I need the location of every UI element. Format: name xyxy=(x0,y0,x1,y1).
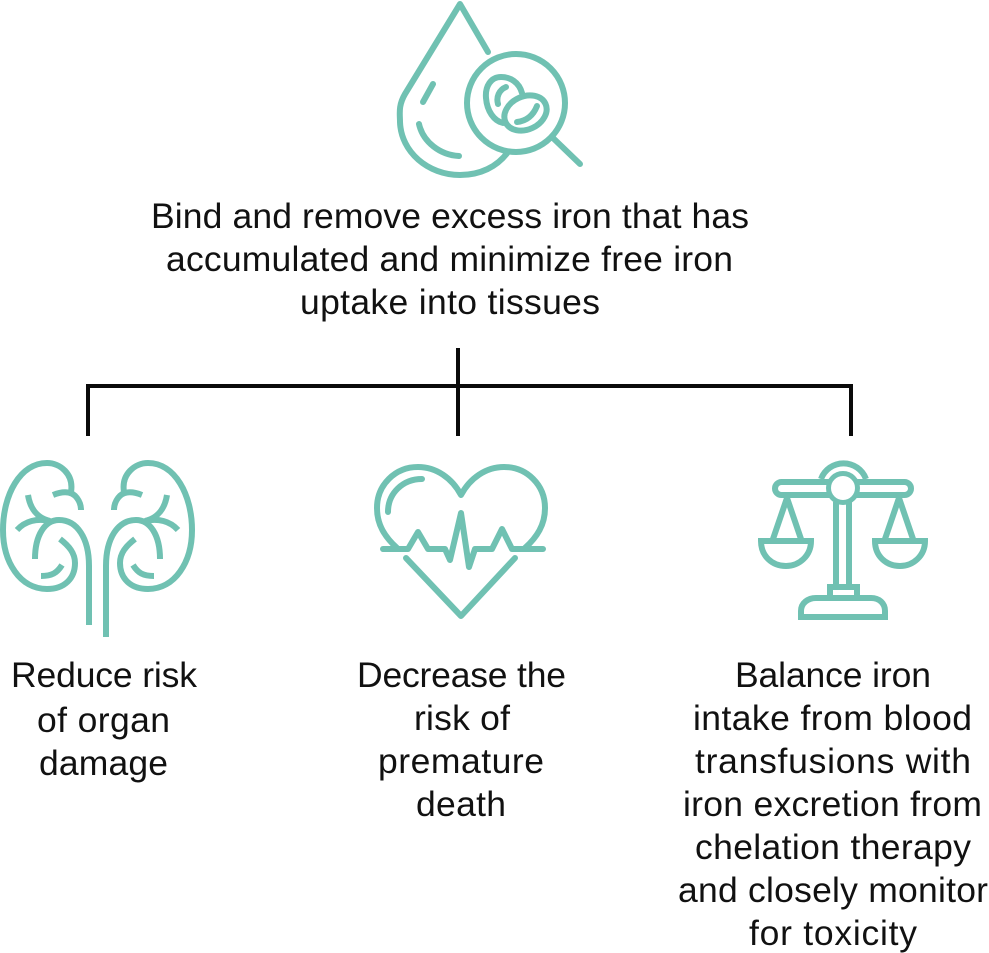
text: balance iron: Balance iron xyxy=(735,655,931,695)
text: reduce risk: of organ xyxy=(37,700,170,740)
text: decrease risk xyxy=(357,655,566,824)
icon: kidneys xyxy=(3,463,192,637)
text: reduce risk: damage xyxy=(39,743,168,783)
text: balance iron: and closely monitor xyxy=(678,870,988,910)
icon: heart with pulse xyxy=(377,467,545,616)
icon: blood drop with magnifier xyxy=(400,4,580,175)
text: decrease risk: risk of xyxy=(414,698,510,738)
heading text xyxy=(151,196,749,322)
text: decrease risk: Decrease the xyxy=(357,655,566,695)
text: reduce risk: Reduce risk xyxy=(11,655,197,695)
text: balance iron: intake from blood xyxy=(693,698,972,738)
connector bracket xyxy=(88,348,851,436)
heading text: accumulated and minimize free iron xyxy=(166,239,733,279)
heading text: Bind and remove excess iron that has xyxy=(151,196,749,236)
text: balance iron: chelation therapy xyxy=(695,827,971,867)
text: balance iron xyxy=(678,655,988,953)
text: reduce risk xyxy=(11,655,197,783)
text: balance iron: iron excretion from xyxy=(683,784,982,824)
text: decrease risk: death xyxy=(416,784,506,824)
text: balance iron: transfusions with xyxy=(695,741,971,781)
text: balance iron: for toxicity xyxy=(749,913,917,953)
icon: balance scales xyxy=(761,463,925,617)
heading text: uptake into tissues xyxy=(300,282,600,322)
text: decrease risk: premature xyxy=(378,741,544,781)
